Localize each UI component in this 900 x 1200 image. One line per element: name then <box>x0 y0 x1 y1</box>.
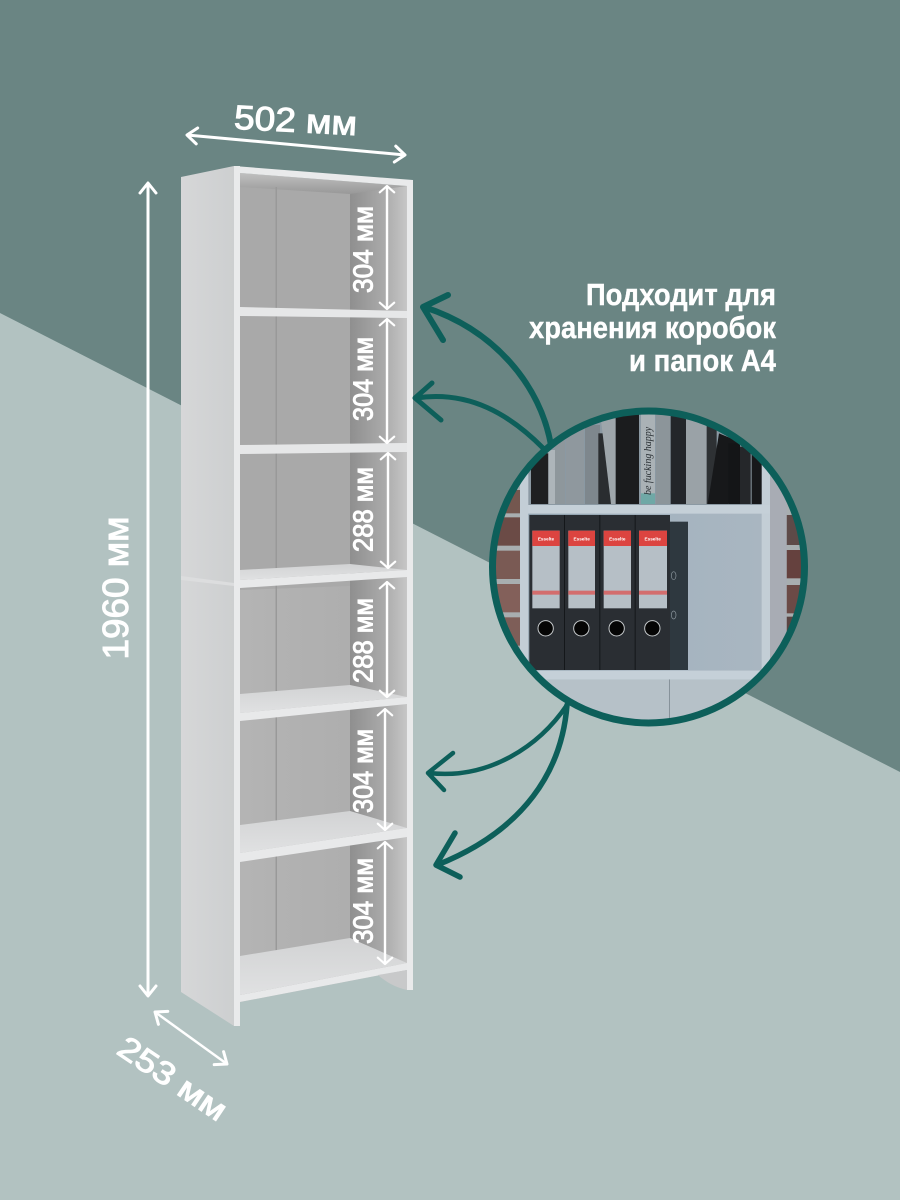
arrow: to upper shelf <box>423 295 551 445</box>
shelf height: 304 mm (2) <box>348 319 387 443</box>
callout text: и папок А4 <box>629 343 777 378</box>
depth dimension: 253 mm: 253 мм <box>111 1029 234 1128</box>
front left post <box>234 166 240 1026</box>
arrow: to second shelf <box>415 383 543 448</box>
shelf height: 288 mm (4) <box>348 582 387 697</box>
side panel joint <box>181 576 234 586</box>
binder label 4: Esselte <box>645 537 661 542</box>
shelf 2 <box>240 443 407 454</box>
book spine text: be fucking happy <box>643 426 654 495</box>
binder label 4 <box>639 531 667 636</box>
shelf 3 <box>240 564 407 588</box>
binder label 2 <box>568 531 595 636</box>
front right post <box>407 180 413 990</box>
lower back panel <box>240 586 350 960</box>
shelf 5 <box>240 811 407 862</box>
shelf height: 304 mm (5): 304 мм <box>348 729 378 813</box>
binder label 3: Esselte <box>609 537 626 542</box>
binder label 1 <box>532 531 560 636</box>
arrow: to fifth shelf <box>428 705 567 790</box>
binder label 1: Esselte <box>538 537 555 542</box>
binder label 3 <box>604 531 631 636</box>
top inner shade <box>240 173 407 194</box>
callout text <box>529 277 777 378</box>
shelf height: 304 mm (1) <box>348 186 387 309</box>
shelf height: 288 mm (4): 288 мм <box>348 598 378 683</box>
width dimension: 502 mm <box>187 99 405 155</box>
shelf height: 304 mm (6) <box>348 842 385 964</box>
shelf boards <box>528 505 770 679</box>
shelf height: 304 mm (6): 304 мм <box>348 858 378 944</box>
side panel <box>181 166 234 1026</box>
books <box>531 413 762 504</box>
back wall <box>240 173 407 1002</box>
shelf height: 288 mm (3) <box>348 453 388 568</box>
shelf 4 <box>240 685 407 721</box>
brick wall <box>496 485 801 649</box>
width dimension: 502 mm: 502 мм <box>233 99 358 143</box>
shelf 1 <box>240 307 407 318</box>
plinth <box>378 970 407 990</box>
shelf height: 304 mm (2): 304 мм <box>348 337 378 421</box>
compartment right walls <box>350 186 407 965</box>
depth dimension: 253 mm <box>111 1012 234 1128</box>
front top rail <box>234 166 413 186</box>
cabinet <box>520 400 787 727</box>
photo ring <box>492 411 804 723</box>
shelf height: 288 mm (3): 288 мм <box>348 467 378 552</box>
arrow: to sixth shelf <box>436 705 567 877</box>
binder label 2: Esselte <box>574 537 590 542</box>
shelf height: 304 mm (5) <box>348 709 385 830</box>
height dimension: 1960 mm: 1960 мм <box>95 516 136 660</box>
shelf 6 <box>240 938 407 1002</box>
background: light diagonal area <box>0 313 900 1200</box>
bookcase illustration <box>181 166 413 1026</box>
binders <box>529 515 688 670</box>
callout text: хранения коробок <box>529 310 776 345</box>
round photo: binders on a shelf <box>485 400 812 727</box>
callout text: Подходит для <box>586 277 776 312</box>
shelf height: 304 mm (1): 304 мм <box>348 206 378 293</box>
